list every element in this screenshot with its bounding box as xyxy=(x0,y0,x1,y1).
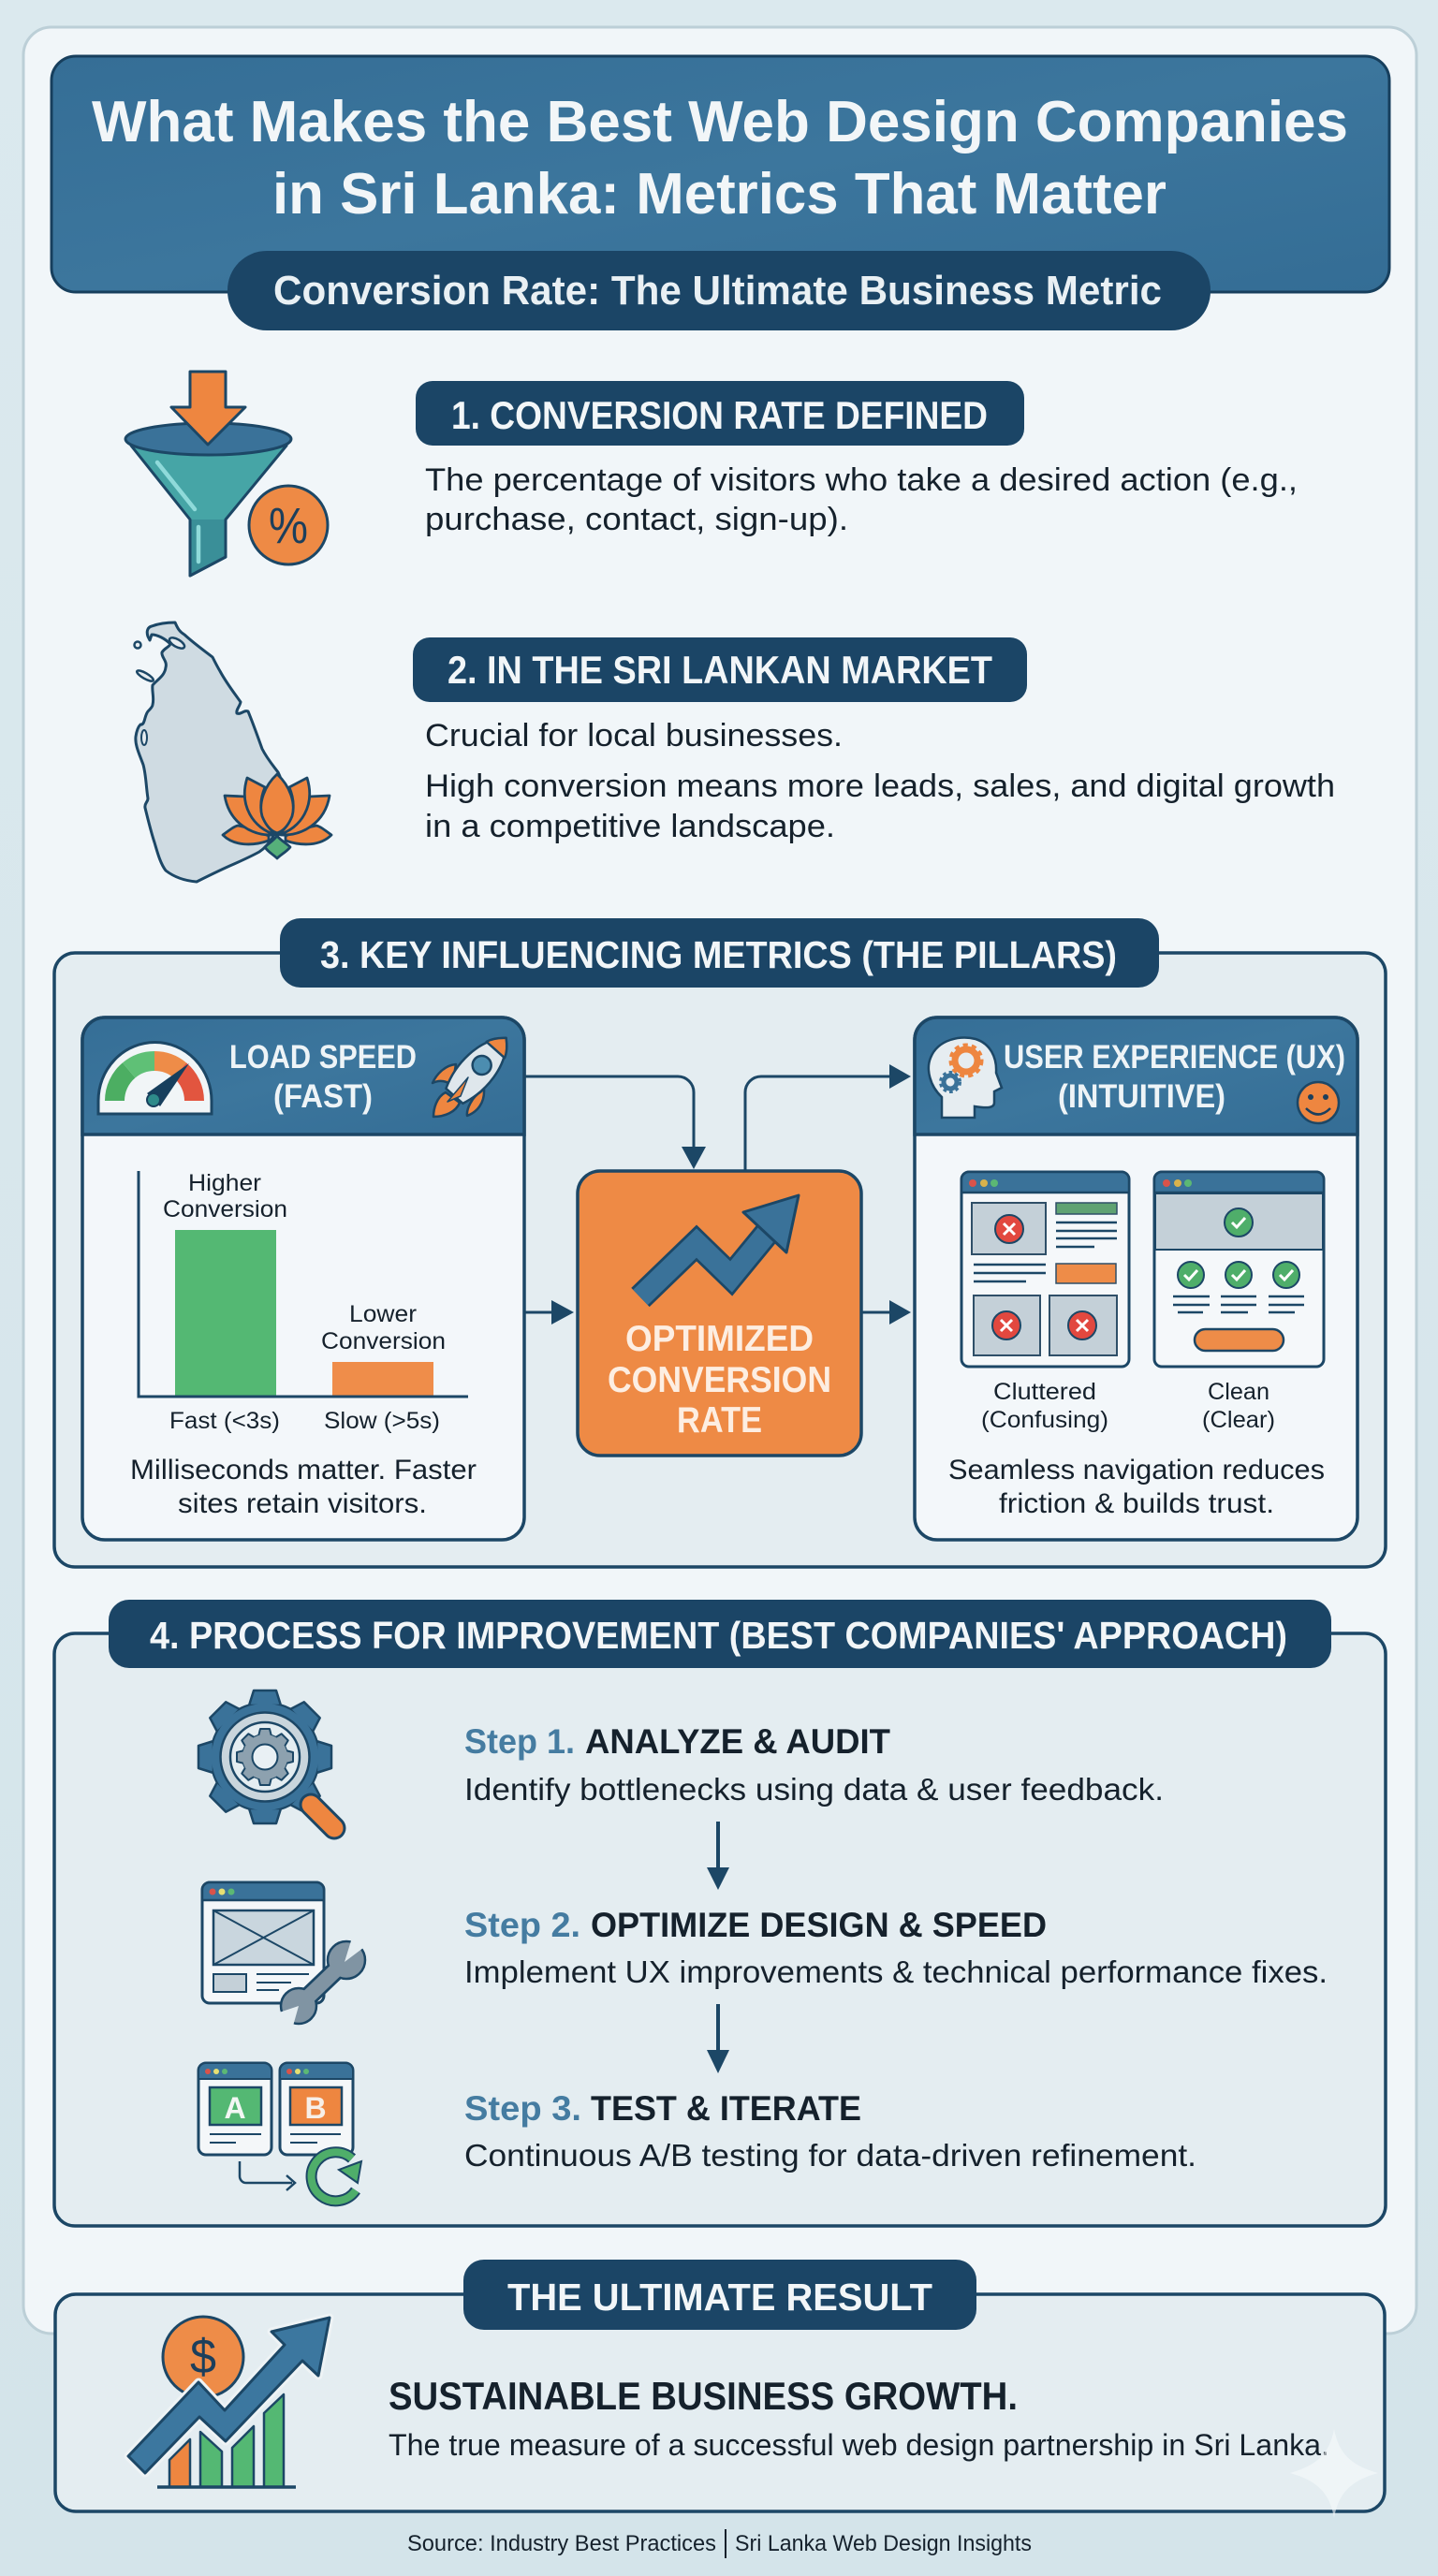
section 2 text: Crucial for local businesses. xyxy=(425,718,843,754)
chart labels: Slow (>5s) xyxy=(324,1408,440,1434)
icon: growth chart with coin: $ xyxy=(190,2330,216,2384)
step 2: Step 2. xyxy=(464,1906,580,1944)
window B xyxy=(280,2063,353,2155)
arrow: conversion to user experience xyxy=(861,1300,911,1325)
section 2 text: in a competitive landscape. xyxy=(425,809,835,844)
wireframe: cluttered xyxy=(961,1172,1129,1367)
icon: smiley xyxy=(1298,1082,1339,1123)
icon: wrench xyxy=(279,1938,367,2029)
result heading: THE ULTIMATE RESULT xyxy=(507,2276,932,2319)
center label: CONVERSION xyxy=(608,1360,831,1400)
chart labels xyxy=(163,1170,446,1434)
section 1 text: The percentage of visitors who take a desired action (e.g., xyxy=(425,462,1298,498)
title: What Makes the Best Web Design Companies xyxy=(92,90,1348,154)
chart labels: Lower xyxy=(349,1301,417,1327)
section 2 text xyxy=(425,718,1335,844)
step 1 xyxy=(464,1722,1164,1807)
panel: process for improvement xyxy=(54,1600,1386,2226)
icon: rocket xyxy=(433,1027,519,1117)
arrow: conversion up to user experience xyxy=(745,1064,911,1171)
wireframe labels: Cluttered xyxy=(993,1379,1096,1405)
bar: fast xyxy=(175,1230,276,1397)
arrow: load speed to conversion xyxy=(524,1076,706,1169)
card title: user experience: (INTUITIVE) xyxy=(1058,1078,1225,1115)
section 1: conversion rate defined xyxy=(416,381,1298,537)
section 2: Sri Lankan market xyxy=(413,637,1335,844)
subtitle pill: Conversion Rate: The Ultimate Business Metric xyxy=(273,268,1162,314)
header panel xyxy=(51,56,1389,330)
card title: user experience: USER EXPERIENCE (UX) xyxy=(1004,1039,1345,1076)
center label: RATE xyxy=(677,1400,762,1441)
step 2 xyxy=(464,1906,1328,1989)
result text: SUSTAINABLE BUSINESS GROWTH. xyxy=(389,2374,1018,2418)
subtitle pill xyxy=(227,251,1211,330)
section 1 heading xyxy=(416,381,1024,446)
icon: funnel with percent xyxy=(125,372,328,576)
card: user experience xyxy=(915,1017,1357,1540)
step 2: Implement UX improvements & technical performance fixes. xyxy=(464,1954,1328,1989)
window B: B xyxy=(304,2091,327,2125)
wireframe labels xyxy=(981,1379,1275,1433)
icon: head with gears xyxy=(929,1038,1002,1118)
load speed caption: sites retain visitors. xyxy=(178,1488,427,1519)
chart labels: Higher xyxy=(188,1170,261,1196)
icon: rising arrow xyxy=(640,1195,799,1297)
wireframe labels: Clean xyxy=(1208,1379,1269,1405)
section 2 heading xyxy=(413,637,1027,702)
wireframe labels: (Confusing) xyxy=(981,1407,1108,1433)
result text xyxy=(389,2374,1329,2462)
load speed caption xyxy=(130,1455,477,1519)
step 1: Identify bottlenecks using data & user feedback. xyxy=(464,1772,1164,1807)
step 3: Step 3. xyxy=(464,2089,581,2128)
step 3: TEST & ITERATE xyxy=(591,2089,861,2128)
center box: optimized conversion rate xyxy=(578,1171,861,1456)
card: load speed xyxy=(82,1017,524,1540)
source footer: Source: Industry Best Practices xyxy=(407,2531,716,2556)
icon: A/B testing xyxy=(198,2063,361,2201)
icon: gear and magnifier xyxy=(198,1690,334,1828)
result text: The true measure of a successful web design partnership in Sri Lanka. xyxy=(389,2428,1329,2462)
user experience caption xyxy=(948,1455,1325,1519)
title: in Sri Lanka: Metrics That Matter xyxy=(272,162,1167,227)
panel: key influencing metrics xyxy=(54,918,1386,1567)
section 4 heading xyxy=(109,1600,1331,1668)
card title: user experience xyxy=(1004,1039,1345,1115)
sparkle watermark xyxy=(1290,2429,1378,2518)
section 3 heading: 3. KEY INFLUENCING METRICS (THE PILLARS) xyxy=(320,933,1117,976)
source footer: Sri Lanka Web Design Insights xyxy=(735,2531,1032,2556)
step 3: Continuous A/B testing for data-driven refinement. xyxy=(464,2138,1196,2173)
bar: slow xyxy=(332,1362,433,1397)
wireframe: clean xyxy=(1154,1172,1324,1367)
section 1 heading: 1. CONVERSION RATE DEFINED xyxy=(451,393,988,437)
icon: lotus xyxy=(223,774,331,858)
icon: wireframe and wrench xyxy=(202,1882,367,2029)
chart labels: Conversion xyxy=(321,1328,446,1354)
icon: funnel with percent: % xyxy=(269,498,308,554)
section 4 heading: 4. PROCESS FOR IMPROVEMENT (BEST COMPANIES' APPROACH) xyxy=(150,1614,1287,1657)
section 1 text: purchase, contact, sign-up). xyxy=(425,502,848,537)
step 1: Step 1. xyxy=(464,1722,575,1761)
result heading xyxy=(463,2260,976,2330)
bar chart: conversion vs speed xyxy=(139,1170,468,1434)
chart labels: Conversion xyxy=(163,1196,287,1222)
section 2 text: High conversion means more leads, sales, and digital growth xyxy=(425,768,1335,804)
section 1 text xyxy=(425,462,1298,537)
user experience caption: Seamless navigation reduces xyxy=(948,1455,1325,1486)
icon: Sri Lanka map with lotus xyxy=(135,622,331,882)
source footer xyxy=(407,2529,1032,2558)
card title: load speed xyxy=(229,1039,417,1115)
icon: refresh xyxy=(312,2152,361,2201)
arrow: load speed chart to conversion xyxy=(524,1300,574,1325)
icon: growth chart with coin xyxy=(128,2317,330,2487)
card title: load speed: (FAST) xyxy=(273,1078,373,1115)
step 1: ANALYZE & AUDIT xyxy=(585,1722,890,1761)
step 2: OPTIMIZE DESIGN & SPEED xyxy=(591,1906,1047,1944)
window A: A xyxy=(224,2091,246,2125)
title xyxy=(92,90,1348,227)
section 3 heading xyxy=(280,918,1159,988)
icon: speed gauge xyxy=(98,1043,212,1114)
center label xyxy=(608,1319,831,1441)
arrow: step 2 to step 3 xyxy=(707,2004,729,2073)
load speed caption: Milliseconds matter. Faster xyxy=(130,1455,477,1486)
wireframe labels: (Clear) xyxy=(1202,1407,1275,1433)
step 3 xyxy=(464,2089,1196,2173)
section 2 heading: 2. IN THE SRI LANKAN MARKET xyxy=(448,648,992,692)
arrow: step 1 to step 2 xyxy=(707,1822,729,1890)
card title: load speed: LOAD SPEED xyxy=(229,1039,417,1076)
panel: the ultimate result xyxy=(55,2260,1385,2518)
chart labels: Fast (<3s) xyxy=(169,1408,280,1434)
center label: OPTIMIZED xyxy=(625,1319,814,1359)
window A xyxy=(198,2063,271,2155)
user experience caption: friction & builds trust. xyxy=(999,1488,1274,1519)
